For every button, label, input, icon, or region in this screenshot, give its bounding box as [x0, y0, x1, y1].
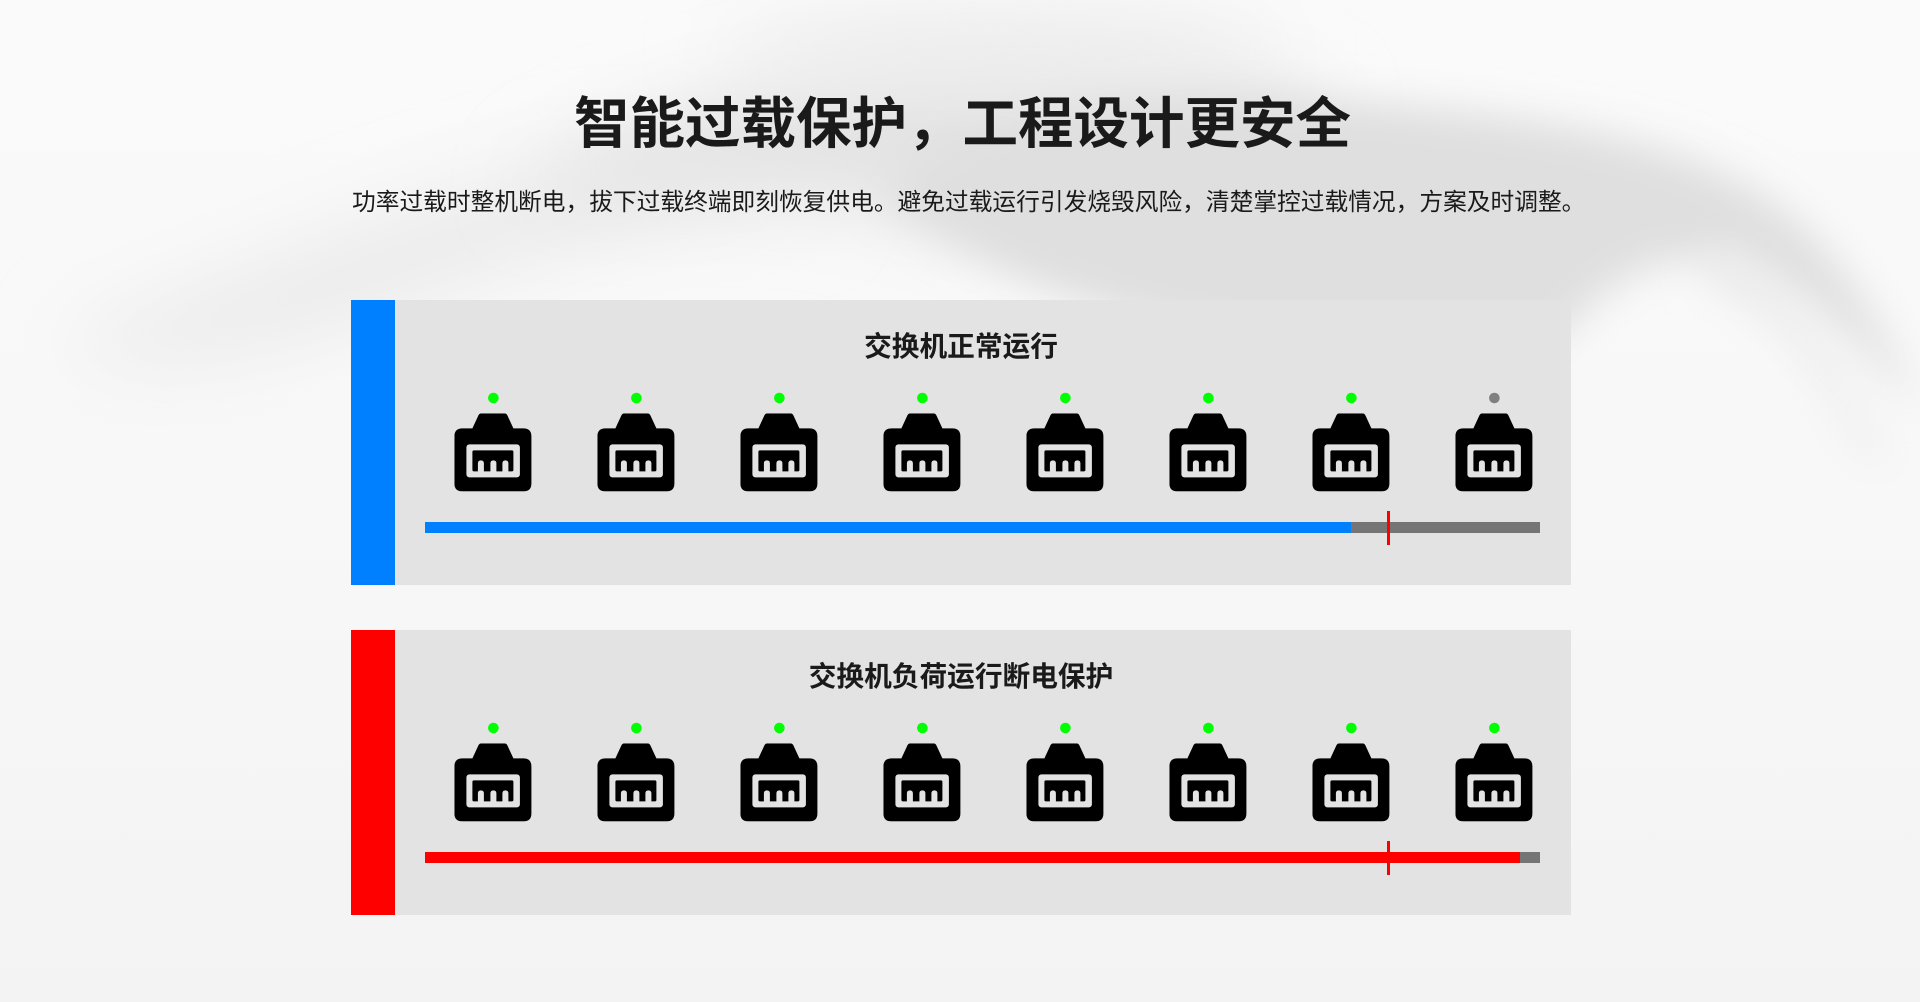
title: 智能过载保护，工程设计更安全 — [574, 93, 1351, 155]
port 4 with status light — [883, 722, 960, 822]
red side bar — [351, 630, 395, 915]
port 1 with status light — [454, 722, 532, 822]
port 7 with status light — [1312, 392, 1390, 492]
port 2 with status light — [597, 392, 674, 492]
port 3 with status light — [740, 392, 818, 492]
port 5 with status light — [1026, 392, 1104, 492]
port 2 with status light — [597, 722, 674, 822]
panel heading: 交换机负荷运行断电保护 — [809, 661, 1113, 692]
port 6 with status light — [1169, 392, 1246, 492]
panel: switch overload protection — [351, 630, 1571, 915]
overload threshold marker — [1387, 511, 1390, 545]
panel: switch normal operation — [351, 300, 1571, 585]
power load bar — [425, 522, 1540, 533]
panel heading: 交换机正常运行 — [864, 331, 1058, 362]
port 8 with inactive light — [1455, 392, 1532, 492]
port 5 with status light — [1026, 722, 1104, 822]
port 4 with status light — [883, 392, 960, 492]
overload threshold marker — [1387, 841, 1390, 875]
port 1 with status light — [454, 392, 532, 492]
subtitle: 功率过载时整机断电，拔下过载终端即刻恢复供电。避免过载运行引发烧毁风险，清楚掌控过载情况，方案及时调整。 — [352, 190, 1585, 216]
port 3 with status light — [740, 722, 818, 822]
port 8 with status light — [1455, 722, 1532, 822]
power load bar — [425, 852, 1540, 863]
blue side bar — [351, 300, 395, 585]
port 6 with status light — [1169, 722, 1246, 822]
port 7 with status light — [1312, 722, 1390, 822]
